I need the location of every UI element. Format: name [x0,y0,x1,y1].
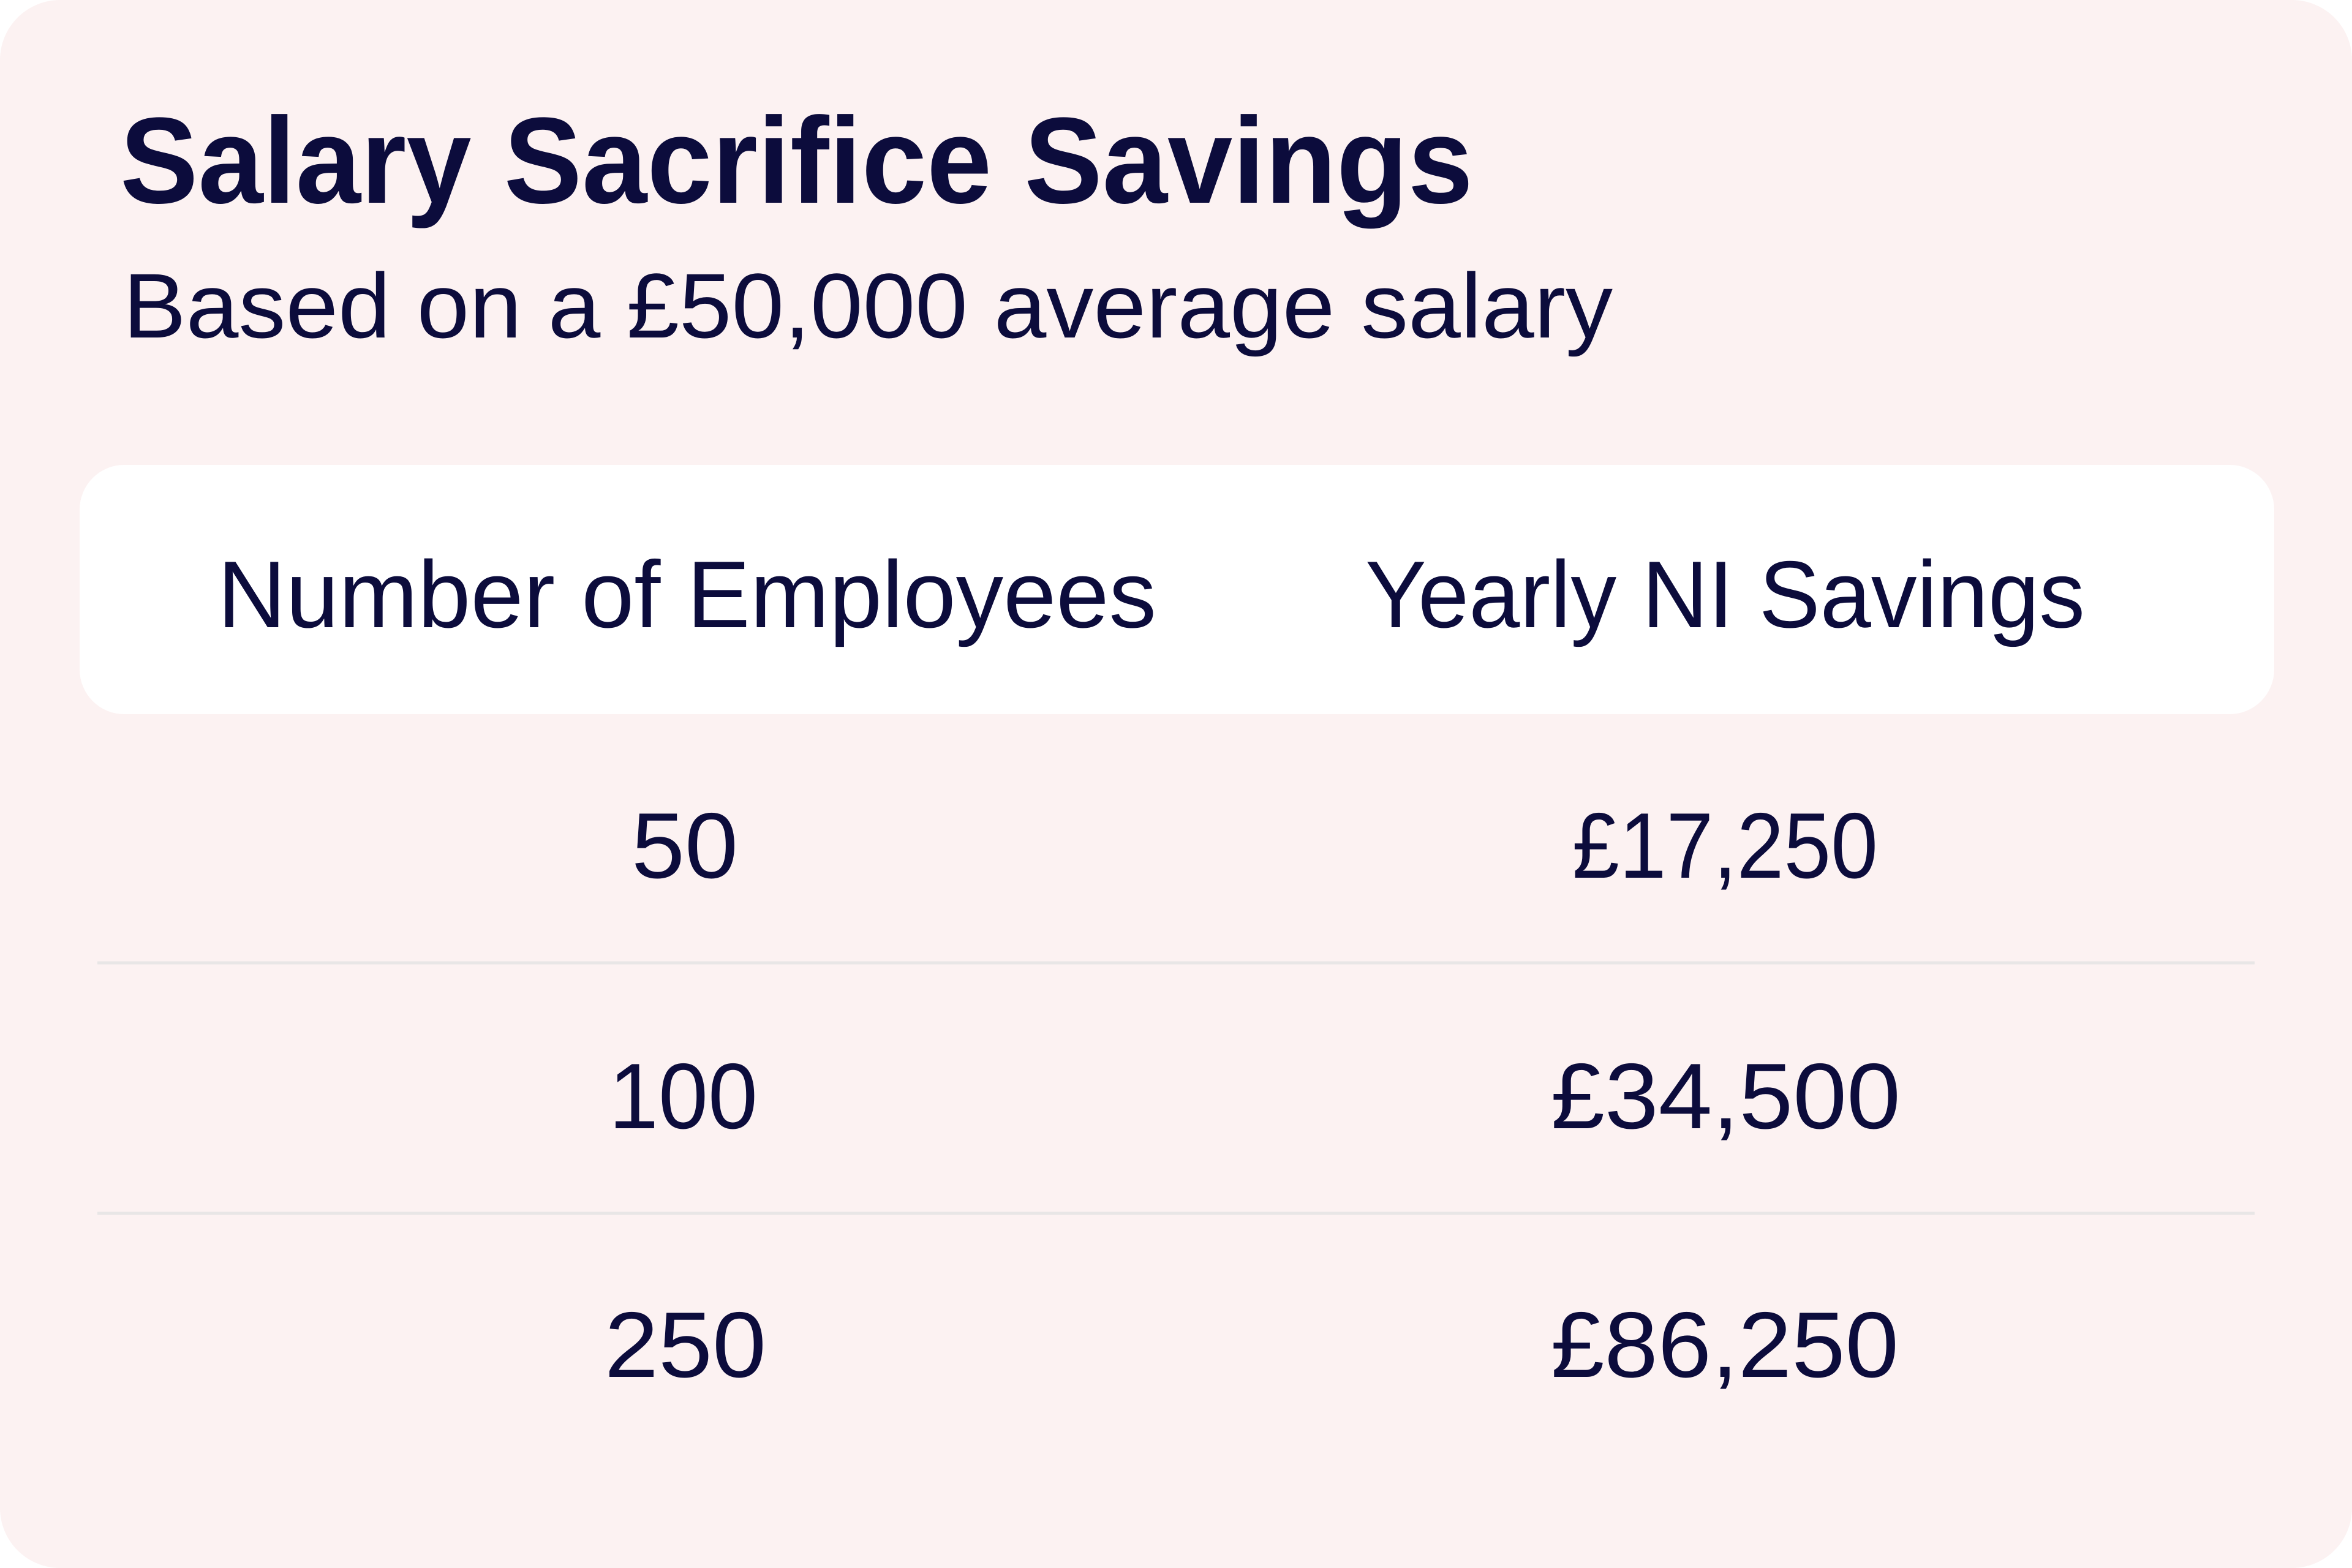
row 3: £86,250 [1551,1293,1899,1397]
row 1 [631,794,1878,898]
row 1: £17,250 [1572,794,1878,898]
title: Salary Sacrifice Savings [120,92,1473,229]
header: number of employees: Number of Employees [217,541,1156,647]
row 2 [609,1044,1901,1148]
row 3 [605,1293,1899,1397]
subtitle: Based on a £50,000 average salary [123,254,1613,357]
row 1: 50 [631,794,738,898]
row 2: 100 [609,1044,758,1148]
table header [80,465,2274,714]
header: yearly NI savings: Yearly NI Savings [1365,541,2085,647]
row 2: £34,500 [1551,1044,1901,1148]
row 3: 250 [605,1293,766,1397]
